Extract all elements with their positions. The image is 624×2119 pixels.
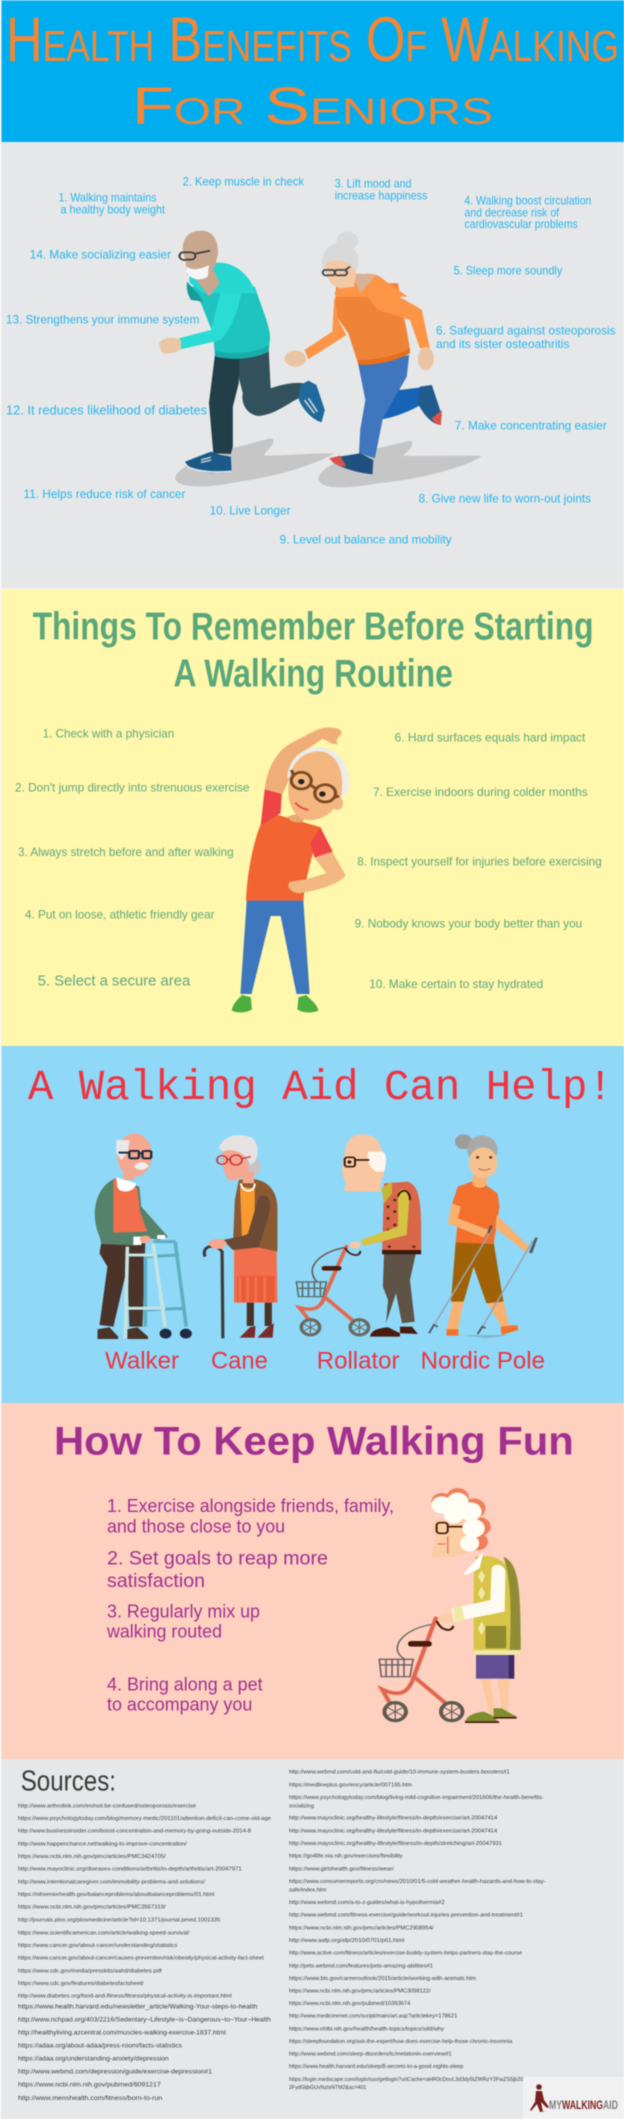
benefit 10: 10. Live Longer [210, 504, 291, 517]
benefit 14: 14. Make socializing easier [30, 249, 171, 262]
sources: right column: http://www.active.com/fitness/articles/exercise-buddy-system-helps-partners-stay-the-course [289, 1951, 522, 1957]
heading: sources: Sources: [21, 1766, 116, 1798]
tip 3 [106, 1602, 260, 1642]
sources: left column: https://www.cdc.gov/media/presskits/aahd/diabetes.pdf [18, 1968, 162, 1974]
tip 2 [107, 1548, 328, 1592]
sources: left column [18, 1803, 271, 2102]
remember 6: 6. Hard surfaces equals hard impact [395, 731, 586, 745]
benefit 13: 13. Strengthens your immune system [6, 313, 199, 326]
sources: right column: https://www.health.harvard.edu/sleep/8-secrets-to-a-good-nights-sleep [289, 2064, 463, 2070]
illustration: lady with rollator [379, 1488, 521, 1723]
benefit 6: 6. Safeguard against osteoporosis [436, 325, 616, 338]
remember 5: 5. Select a secure area [38, 973, 191, 989]
benefit 3: increase happiness [335, 189, 428, 202]
benefit 4 [464, 195, 591, 231]
sources: left column: https://www.ncbi.nlm.nih.gov/pubmed/6091217 [18, 2082, 161, 2089]
logo wordmark: MYWALKINGAID [549, 2098, 618, 2112]
sources: left column: http://www.webmd.com/depression/guide/exercise-depression#1 [18, 2069, 212, 2076]
fun tips list [106, 1496, 394, 1715]
benefit 5: 5. Sleep more soundly [454, 265, 562, 278]
panel: keep walking fun background [2, 1403, 624, 1759]
sources: right column: socializing [289, 1803, 314, 1809]
sources: left column: https://www.ncbi.nlm.nih.gov/pmc/articles/PMC3567319/ [18, 1905, 166, 1911]
title: line two: For Seniors [132, 77, 493, 136]
sources: right column: http://www.webmd.com/sleep-disorders/tc/melatonin-overview#1 [289, 2051, 452, 2057]
sources: left column: http://www.arthrolink.com/en/not-be-confused/osteoporosis/exercise [18, 1803, 196, 1809]
sources: right column: https://www.girlshealth.gov/fitness/wear/ [289, 1866, 394, 1872]
remember 2: 2. Don't jump directly into strenuous exercise [15, 781, 250, 795]
sources: left column: http://www.businessinsider.com/boost-concentration-and-memory-by-going-outside-2014-8 [18, 1829, 251, 1835]
benefit 4: cardiovascular problems [464, 218, 578, 231]
sources: left column: http://www.diabetes.org/food-and-fitness/fitness/physical-activity-is-important.html [18, 1994, 232, 2000]
logo: mywalkingaid [523, 2077, 624, 2119]
sources: left column: https://adaa.org/about-adaa/press-room/facts-statistics [18, 2043, 182, 2050]
sources: left column: http://www.menshealth.com/fitness/born-to-run [18, 2095, 163, 2102]
panel: things to remember background [2, 589, 624, 1046]
benefit 2: 2. Keep muscle in check [183, 175, 304, 188]
sources: right column: https://go4life.nia.nih.gov/exercises/flexibility [289, 1854, 403, 1860]
panel: walking aid background [2, 1046, 624, 1403]
tip 3: 3. Regularly mix up [107, 1602, 260, 1622]
benefit 1: 1. Walking maintains [58, 192, 157, 205]
benefit 3 [335, 177, 428, 202]
sources: left column: http://www.nchpad.org/403/2216/Sedentary~Lifestyle~is~Dangerous~to~Your~Health [18, 2017, 271, 2024]
sources: right column: https://www.ncbi.nlm.nih.gov/pubmed/10393674 [289, 2001, 411, 2007]
heading: keep walking fun: How To Keep Walking Fun [54, 1419, 574, 1463]
figure: walker man [95, 1133, 192, 1339]
sources: right column: https://www.psychologytoday.com/blog/living-mild-cognitive-impairment/201606/the-health-benefits- [289, 1795, 544, 1801]
tip 1 [107, 1496, 394, 1536]
sources: left column: https://www.cancer.gov/about-cancer/understanding/statistics [18, 1943, 177, 1949]
benefit 6: and its sister osteoathritis [436, 338, 570, 351]
benefit 11: 11. Helps reduce risk of cancer [24, 488, 186, 501]
benefit 8: 8. Give new life to worn-out joints [419, 493, 591, 506]
panel: walking benefits background [2, 142, 624, 588]
sources: right column: http://pets.webmd.com/features/pets-amazing-abilities#1 [289, 1963, 433, 1969]
label: cane: Cane [211, 1348, 268, 1375]
benefit 3: 3. Lift mood and [335, 177, 412, 190]
tip 1: and those close to you [107, 1516, 285, 1536]
benefit 12: 12. It reduces likelihood of diabetes [6, 403, 207, 418]
figure: man walking [159, 231, 325, 473]
sources: right column: http://www.webmd.com/cold-and-flu/cold-guide/10-immune-system-busters-boosters#1 [289, 1770, 510, 1776]
tip 2: 2. Set goals to reap more [107, 1548, 328, 1570]
tip 2: satisfaction [107, 1570, 205, 1592]
sources: left column: https://www.cdc.gov/features/diabetesfactsheet/ [18, 1981, 144, 1987]
remember list [15, 727, 602, 991]
figure: woman walking [285, 232, 442, 474]
sources: right column: http://www.mayoclinic.org/healthy-lifestyle/fitness/in-depth/exercise/art-20047414 [289, 1828, 498, 1834]
sources: right column: safe/index.htm [289, 1887, 326, 1893]
remember 7: 7. Exercise indoors during colder months [373, 785, 588, 799]
remember 9: 9. Nobody knows your body better than you [355, 917, 582, 931]
sources: left column: https://www.psychologytoday.com/blog/memory-medic/201101/attention-deficit-can-come-old-age [18, 1816, 271, 1822]
tip 4 [107, 1675, 263, 1715]
sources: left column: https://www.health.harvard.edu/newsletter_article/Walking-Your-steps-to-health [18, 2004, 258, 2011]
sources: right column: https://www.consumerreports.org/cro/news/2010/01/5-cold-weather-health-hazards-and-how-to-stay- [289, 1879, 546, 1885]
tip 1: 1. Exercise alongside friends, family, [107, 1496, 394, 1516]
sources: left column: https://nihseniorhealth.gov/balanceproblems/aboutbalanceproblems/01.html [18, 1892, 214, 1898]
sources: right column: https://login.medscape.com/login/sso/getlogin?urlCache=aHR0cDovL3d3dy5tZWRzY2FwZS5jb20vdmlld [289, 2077, 539, 2083]
label: walker: Walker [105, 1348, 179, 1375]
benefit 4: and decrease risk of [464, 206, 560, 219]
panel: sources background [2, 1759, 624, 2119]
sources: left column: http://journals.plos.org/plosmedicine/article?id=10.1371/journal.pmed.1001335 [18, 1918, 220, 1924]
remember 4: 4. Put on loose, athletic friendly gear [25, 907, 215, 921]
sources: right column: https://www.ncbi.nlm.nih.gov/pmc/articles/PMC2908954/ [289, 1925, 434, 1931]
heading: things to remember [33, 605, 594, 696]
remember 1: 1. Check with a physician [43, 727, 174, 741]
tip 4: to accompany you [107, 1695, 252, 1715]
benefit 4: 4. Walking boost circulation [464, 195, 591, 208]
sources: right column: http://www.webmd.com/fitness-exercise/guide/workout-injuries-prevention-and-treatment#1 [289, 1913, 523, 1919]
sources: right column: http://www.webmd.com/a-to-z-guides/what-is-hypothermia#2 [289, 1900, 445, 1906]
benefit 9: 9. Level out balance and mobility [280, 534, 452, 547]
figure group: walking aids [95, 1133, 538, 1339]
benefit 7: 7. Make concentrating easier [455, 419, 607, 432]
sources: left column: http://healthyliving.azcentral.com/muscles-walking-exercise-1837.html [18, 2030, 226, 2037]
heading: walking aid: A Walking Aid Can Help! [28, 1063, 613, 1112]
sources: right column [289, 1770, 546, 2091]
remember 3: 3. Always stretch before and after walking [18, 845, 234, 859]
illustration: stretching man [232, 727, 349, 1012]
sources: right column: http://www.mayoclinic.org/healthy-lifestyle/fitness/in-depth/stretching/art-20047931 [289, 1841, 502, 1847]
sources: right column: http://www.medicinenet.com/script/main/art.asp?articlekey=178621 [289, 2014, 457, 2020]
sources: right column: 2FydGljbGUvNzIxNTM2&ac=401 [289, 2085, 366, 2091]
sources: right column: http://www.mayoclinic.org/healthy-lifestyle/fitness/in-depth/exercise/art-20047414 [289, 1816, 498, 1822]
benefit 1: a healthy body weight [60, 204, 166, 217]
tip 4: 4. Bring along a pet [107, 1675, 263, 1695]
sources: right column: https://medlineplus.gov/ency/article/007165.htm [289, 1782, 412, 1788]
sources: right column: https://www.nhlbi.nih.gov/health/health-topics/topics/sdd/why [289, 2026, 444, 2032]
figure: nordic pole lady [429, 1134, 538, 1338]
sources: right column: https://www.ncbi.nlm.nih.gov/pmc/articles/PMC3098122/ [289, 1988, 431, 1994]
illustration: walking couple [159, 231, 482, 487]
sources: left column: http://www.happenchance.net/walking-to-improve-concentration/ [18, 1841, 187, 1847]
sources: right column: https://www.bls.gov/careeroutlook/2015/article/working-with-animals.htm [289, 1976, 476, 1982]
benefits list [6, 175, 616, 547]
benefit 1 [58, 192, 166, 217]
label: nordic pole: Nordic Pole [421, 1348, 545, 1375]
remember 10: 10. Make certain to stay hydrated [369, 977, 543, 991]
sources: left column: https://www.cancer.gov/about-cancer/causes-prevention/risk/obesity/physical-activity-fact-sheet [18, 1956, 264, 1962]
sources: left column: http://www.mayoclinic.org/diseases-conditions/arthritis/in-depth/arthritis/art-20047971 [18, 1867, 242, 1873]
sources: left column: https://www.scientificamerican.com/article/walking-speed-survival/ [18, 1930, 190, 1936]
heading: things to remember: A Walking Routine [174, 653, 453, 696]
shadow: man [175, 438, 334, 486]
shadow: woman [318, 441, 482, 487]
figure: cane lady [204, 1135, 277, 1338]
sources: right column: https://sleepfoundation.org/ask-the-expert/how-does-exercise-help-those-chronic-insomnia [289, 2039, 513, 2045]
icon: walking person [530, 2084, 549, 2112]
remember 8: 8. Inspect yourself for injuries before exercising [357, 854, 602, 868]
sources: right column: http://www.aafp.org/afp/2010/0701/p61.html [289, 1938, 404, 1944]
sources: left column: https://www.ncbi.nlm.nih.gov/pmc/articles/PMC3424705/ [18, 1854, 166, 1860]
benefit 6 [436, 325, 616, 351]
tip 3: walking routed [106, 1622, 222, 1642]
panel: title header [2, 0, 624, 142]
sources: left column: https://adaa.org/understanding-anxiety/depression [18, 2056, 169, 2063]
figure: rollator man [297, 1134, 421, 1337]
label: rollator: Rollator [317, 1348, 400, 1375]
sources: left column: http://www.intentionalcaregiver.com/immobility-problems-and-solutions/ [18, 1879, 205, 1885]
